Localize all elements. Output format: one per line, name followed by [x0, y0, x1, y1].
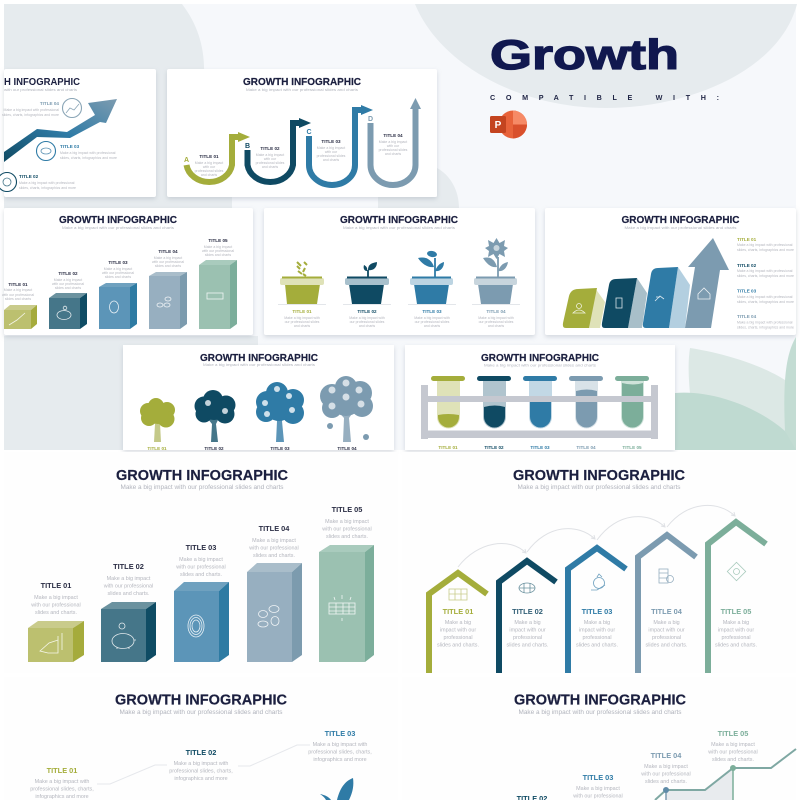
- label: title 04: Make a big impact with: [478, 316, 514, 320]
- label: title 03: with our professional: [572, 794, 623, 800]
- label: title 01: slides, charts, infographics and more: [737, 248, 794, 252]
- label: title 01: infographics and more: [35, 794, 89, 800]
- label: title 04: TITLE 04: [651, 607, 683, 616]
- label: title 04: and charts: [488, 324, 504, 328]
- label: title 03: Make a big impact with professional: [737, 295, 793, 299]
- label: title 05: Make a big: [723, 620, 749, 626]
- pot 4: flower: [472, 238, 520, 305]
- item: title 03: with our: [325, 150, 338, 154]
- arrow B: [245, 118, 311, 182]
- label: title 02: professional: [513, 635, 542, 641]
- icon: PowerPoint logo: [490, 110, 527, 138]
- label: title 05: Make a big impact: [325, 519, 369, 525]
- label: title 01: Make a big impact with: [284, 316, 320, 320]
- label: title 03: TITLE 03: [186, 543, 216, 552]
- subtitle: Make a big impact with our professional slides and charts: [203, 363, 315, 367]
- label: title 04: TITLE 04: [651, 751, 682, 760]
- label: title 04: slides and charts.: [645, 779, 687, 785]
- label: title 03: our professional slides: [415, 320, 450, 324]
- bar 2: [101, 602, 156, 662]
- label: tube titles (cropped): TITLE 03: [530, 445, 550, 450]
- pot 2: sprout: [343, 262, 391, 305]
- label: title 02: impact with our: [509, 628, 546, 634]
- label: title 05: impact with our: [718, 628, 754, 634]
- item: title 01: [195, 154, 224, 177]
- item: title 04: with our: [387, 144, 400, 148]
- label: title 04: our professional slides: [479, 320, 514, 324]
- label: title 05: [715, 607, 757, 648]
- label: title 05: Make a big impact: [204, 245, 232, 249]
- arrow D: [368, 98, 421, 185]
- label: title 04: Make a big impact: [644, 764, 688, 770]
- label: title 02: TITLE 02: [512, 607, 543, 616]
- icon: coin stacks: [329, 595, 355, 621]
- heading: GROWTH INFOGRAPHIC: [340, 215, 458, 226]
- rack front bar: [428, 396, 651, 402]
- icon: money bag: [591, 574, 605, 590]
- label: title 02: [349, 309, 385, 328]
- label: title 02: TITLE 02: [58, 271, 78, 276]
- item: title 04: TITLE 04: [40, 101, 59, 106]
- label: title 03: TITLE 03: [422, 309, 442, 314]
- label: title 02: [169, 748, 233, 782]
- label: title 03: slides and charts: [105, 275, 131, 279]
- item: title 03: [317, 139, 346, 162]
- label: title 03: [175, 543, 226, 578]
- bar 4: [149, 272, 187, 329]
- label: title 01: professional: [443, 635, 473, 641]
- label: title 01: slides and charts.: [35, 610, 77, 616]
- label: title 01: [30, 581, 81, 616]
- label: title 03: Make a big impact with: [313, 742, 367, 748]
- label: title 03: Make a big impact: [576, 786, 620, 792]
- chart: folded ribbon arrow: [563, 238, 729, 328]
- label: title 05: Make a big impact: [711, 742, 755, 748]
- label: title 01: Make a big impact: [34, 595, 78, 601]
- label: title 04: TITLE 04: [158, 249, 178, 254]
- label: title 03: professional slides, charts,: [308, 750, 372, 756]
- label: title 05: with our professional: [202, 249, 234, 253]
- label: tube titles (cropped): TITLE 02: [484, 445, 504, 450]
- label: title 04: with our professional: [152, 260, 184, 264]
- label: title 04: Make a big: [653, 620, 680, 626]
- icon: ribbon icons: [573, 288, 710, 313]
- label: title 05: [202, 238, 234, 257]
- item: title 03: [60, 144, 117, 160]
- heading: GROWTH INFOGRAPHIC: [481, 353, 599, 364]
- label: title 02: Make a big impact: [54, 278, 82, 282]
- label: title 01: TITLE 01: [8, 282, 28, 287]
- panel: large 3D bars slide: [4, 452, 398, 673]
- item: title 01: professional slides: [195, 169, 224, 173]
- item: title 02: [256, 146, 285, 169]
- label: title 01: [437, 607, 479, 648]
- item: title 04: professional slides: [379, 148, 408, 152]
- label: title 01: Make a big impact with: [35, 779, 89, 785]
- icon: hand with coins: [40, 633, 62, 653]
- icon: PowerPoint logo: P: [495, 120, 502, 131]
- heading: GROWTH INFOGRAPHIC: [59, 215, 177, 226]
- label: title 03: [308, 729, 372, 763]
- subtitle: Make a big impact with our professional slides and charts: [246, 88, 358, 92]
- decoration: green leaves: [675, 337, 796, 450]
- arrow A: A: [184, 157, 189, 164]
- rack back posts and bottom bar: [421, 385, 658, 439]
- subtitle: Make a big impact with our professional slides and charts: [120, 709, 282, 716]
- label: title 02: infographics and more: [174, 776, 228, 782]
- bar 1: [28, 621, 84, 662]
- heading: GROWTH INFOGRAPHIC: [514, 692, 687, 708]
- label: title 01: professional slides, charts,: [30, 786, 94, 792]
- label: title 02: [507, 607, 548, 648]
- label: title 02: professional slides, charts,: [169, 768, 233, 774]
- label: title 03: [737, 288, 794, 304]
- arrow C: [306, 105, 373, 185]
- label: title 01: Make a big impact: [4, 288, 32, 292]
- label: title 03: [572, 773, 623, 800]
- text: compatible with: COMPATIBLE WITH:: [490, 93, 719, 102]
- label: title 03: [102, 260, 134, 279]
- label: title 05: slides and charts.: [326, 534, 368, 540]
- item: title 02: slides, charts, infographics and more: [19, 186, 76, 190]
- label: title 01: [737, 237, 794, 252]
- label: title 05: professional: [721, 635, 751, 641]
- subtitle: Make a big impact with our professional slides and charts: [518, 484, 680, 491]
- item: title 04: slides, charts, infographics and more: [2, 113, 59, 117]
- label: title 02: and charts: [359, 324, 375, 328]
- item: title 04: [379, 133, 408, 156]
- step 1: [429, 573, 487, 673]
- item: title 02: professional slides: [256, 161, 285, 165]
- item: title 02: TITLE 02: [260, 146, 280, 151]
- step 3: [568, 548, 626, 673]
- tube 4: [569, 376, 603, 429]
- label: tree titles (cropped): [147, 446, 357, 451]
- panel: house steps slide: [402, 452, 796, 673]
- subtitle: Make a big impact with our professional slides and charts: [624, 226, 737, 230]
- arrow: rising trend: [4, 99, 117, 162]
- subtitle: Make a big impact with our professional slides and charts: [484, 364, 596, 368]
- item: title 01: with our: [203, 165, 216, 169]
- icon: banknotes: [727, 562, 746, 581]
- item: title 04: [2, 101, 59, 117]
- label: title 04: [737, 314, 794, 330]
- label: title 03: slides and charts.: [180, 572, 222, 578]
- label: title 03: professional: [582, 635, 612, 641]
- label: tube titles (cropped): TITLE 01: [438, 445, 458, 450]
- label: title 02: Make a big impact with: [174, 761, 228, 767]
- label: title 03: impact with our: [579, 628, 615, 634]
- item: title 03: Make a big impact: [317, 146, 345, 150]
- bar 4: [247, 563, 302, 662]
- subtitle: with our professional slides and charts: [4, 88, 77, 92]
- tree 3: [256, 382, 304, 442]
- arrow C: C: [306, 129, 312, 136]
- label: title 04: slides and charts: [155, 264, 181, 268]
- subtitle: Make a big impact with our professional slides and charts: [518, 709, 682, 716]
- pot 3: plant: [408, 250, 456, 305]
- label: title 04: TITLE 04: [737, 314, 757, 319]
- item: title 03: TITLE 03: [321, 139, 341, 144]
- label: title 05: TITLE 05: [208, 238, 228, 243]
- step 2: [499, 561, 556, 673]
- icon: coins: [258, 606, 279, 627]
- tree 2: [194, 390, 236, 442]
- label: title 04: with our professional: [640, 772, 691, 778]
- label: title 04: Make a big impact with professional: [737, 320, 793, 324]
- panel: U-arrows slide: [167, 69, 437, 197]
- tree 1: [140, 398, 175, 442]
- arrow B: B: [245, 143, 250, 150]
- label: title 02: slides and charts.: [108, 591, 149, 597]
- label: title 03: slides, charts, infographics and more: [737, 300, 794, 304]
- subtitle: Make a big impact with our professional slides and charts: [343, 226, 455, 230]
- label: title 02: with our professional: [103, 584, 153, 590]
- item: title 04: Make a big impact: [379, 140, 407, 144]
- label: title 01: our professional slides: [285, 320, 320, 324]
- panel: folded arrow slide: [545, 208, 796, 335]
- bar 2: [49, 293, 87, 329]
- bar 3: [174, 582, 229, 662]
- label: title 05: slides and charts: [205, 253, 231, 257]
- item: title 03: TITLE 03: [60, 144, 80, 149]
- label: title 03: TITLE 03: [325, 729, 355, 738]
- label: tree titles (cropped): TITLE 02: [204, 446, 224, 451]
- label: title 04: [248, 524, 299, 559]
- label: title 04: slides and charts.: [646, 642, 687, 648]
- label: title 02: [103, 562, 153, 597]
- label: title 03: slides and charts.: [576, 642, 618, 648]
- item: title 03: Make a big impact with professional: [60, 151, 116, 155]
- label: title 01: TITLE 01: [47, 766, 77, 775]
- label: title 05: with our professional: [321, 526, 372, 532]
- subtitle: Make a big impact with our professional slides and charts: [120, 484, 284, 491]
- label: title 04: [152, 249, 184, 268]
- bar 5: [319, 545, 374, 662]
- icon: banknote: [449, 589, 467, 600]
- item: title 04: and charts: [385, 152, 401, 156]
- step 5: [708, 522, 766, 673]
- item: title 04: TITLE 04: [383, 133, 403, 138]
- label: title 02: TITLE 02: [357, 309, 377, 314]
- panel: test tubes slide: [405, 345, 675, 450]
- item: title 04: Make a big impact with professional: [4, 108, 59, 112]
- label: title 03: TITLE 03: [583, 773, 613, 782]
- icon: coins ring: [36, 142, 56, 160]
- heading: Growth: Growth: [490, 31, 679, 78]
- item: title 01: Make a big impact: [195, 161, 223, 165]
- label: title 05: TITLE 05: [332, 505, 362, 514]
- tree 4: [320, 376, 373, 442]
- tube 2: [477, 376, 511, 429]
- icon: coin stack: [519, 583, 535, 593]
- item: title 02: [19, 174, 76, 190]
- item: title 03: professional slides: [317, 154, 346, 158]
- panel: line chart slide: [402, 677, 796, 800]
- label: title 04: slides, charts, infographics and more: [737, 326, 794, 330]
- label: title 01: TITLE 01: [737, 237, 757, 242]
- subtitle: Make a big impact with our professional slides and charts: [62, 226, 174, 230]
- label: title 02: slides and charts: [55, 286, 81, 290]
- tube 3: [523, 376, 557, 429]
- panel: trees slide: [123, 345, 394, 451]
- label: title 03: with our professional: [102, 271, 134, 275]
- label: title 03: Make a big impact with: [414, 316, 450, 320]
- label: title 02: slides, charts, infographics and more: [737, 274, 794, 278]
- tube 5: [615, 376, 649, 429]
- heading: GROWTH INFOGRAPHIC: [243, 77, 361, 88]
- label: title 04: slides and charts.: [253, 553, 295, 559]
- label: tree titles (cropped): TITLE 03: [270, 446, 290, 451]
- label: title 04: [646, 607, 687, 648]
- label: title 02: Make a big impact: [107, 576, 151, 582]
- heading: GROWTH INFOGRAPHIC: [200, 353, 318, 364]
- panel: arrow slide (cropped): [0, 69, 156, 197]
- label: title 01: TITLE 01: [292, 309, 312, 314]
- label: title 04: TITLE 04: [259, 524, 290, 533]
- item: title 02: Make a big impact with professional: [19, 181, 75, 185]
- item: title 01: and charts: [201, 173, 217, 177]
- heading: GROWTH INFOGRAPHIC: [116, 468, 289, 484]
- label: title 04: [478, 309, 514, 328]
- label: title 03: Make a big impact: [104, 267, 132, 271]
- label: tube titles (cropped): [438, 445, 642, 450]
- label: title 01: slides and charts: [5, 297, 31, 301]
- label: title 03: TITLE 03: [108, 260, 128, 265]
- label: title 02: Make a big: [514, 620, 541, 626]
- label: title 03: infographics and more: [313, 757, 367, 763]
- heading: GROWTH INFOGRAPHIC: [115, 692, 288, 708]
- label: tube titles (cropped): TITLE 04: [576, 445, 596, 450]
- heading: GROWTH INFOGRAPHIC: [513, 468, 686, 484]
- label: title 01: TITLE 01: [41, 581, 71, 590]
- item: title 01: TITLE 01: [199, 154, 219, 159]
- label: tree titles (cropped): TITLE 01: [147, 446, 167, 451]
- icon: piggy bank: [112, 623, 136, 649]
- label: title 01: impact with our: [440, 628, 476, 634]
- icon: blue leaves: [320, 778, 353, 800]
- icon: coin stack with coin: [659, 569, 674, 583]
- item: title 02: TITLE 02: [19, 174, 39, 179]
- arrow D: D: [368, 116, 373, 123]
- bar 3: [99, 283, 137, 329]
- label: title 01: with our professional: [30, 602, 81, 608]
- label: title 01: with our professional: [2, 293, 34, 297]
- label: title 02: slides and charts.: [507, 642, 548, 648]
- label: title 02: [737, 263, 794, 278]
- label: title 01: TITLE 01: [443, 607, 473, 616]
- label: tree titles (cropped): TITLE 04: [337, 446, 357, 451]
- label: title 02: our professional slides: [350, 320, 385, 324]
- label: title 02: Make a big impact with professional: [737, 269, 793, 273]
- label: title 04: with our professional: [248, 546, 299, 552]
- label: title 04: [640, 751, 691, 785]
- label: title 01: [30, 766, 94, 800]
- bar 5: [199, 260, 237, 329]
- icon: chart ring: [62, 98, 82, 118]
- label: title 05: slides and charts.: [712, 757, 754, 763]
- heading: H INFOGRAPHIC: [4, 77, 80, 88]
- step 4: [638, 535, 696, 673]
- label: title 05: TITLE 05: [721, 607, 751, 616]
- item: title 03: and charts: [323, 158, 339, 162]
- label: title 05: [321, 505, 372, 540]
- item: title 02: Make a big impact: [256, 153, 284, 157]
- label: title 01: Make a big: [445, 620, 471, 626]
- label: title 01: slides and charts.: [437, 642, 479, 648]
- panel: plant pots slide: [264, 208, 535, 335]
- label: title 01: and charts: [294, 324, 310, 328]
- panel: plant steps slide: [4, 677, 398, 800]
- label: tube titles (cropped): TITLE 05: [622, 445, 642, 450]
- label: title 05: with our professional: [707, 750, 758, 756]
- tube 1: [431, 376, 465, 429]
- label: title 02: TITLE 02: [737, 263, 757, 268]
- pot 1: seeds: [278, 262, 326, 305]
- label: title 04: Make a big impact: [252, 538, 296, 544]
- connector lines: [97, 745, 310, 784]
- label: title 03: with our professional: [175, 564, 226, 570]
- heading: GROWTH INFOGRAPHIC: [622, 215, 740, 226]
- label: title 03: TITLE 03: [737, 288, 757, 294]
- label: title 01: Make a big impact with professional: [737, 243, 793, 247]
- panel: small bars slide: [2, 208, 253, 335]
- promo banner background: [4, 4, 797, 450]
- label: title 03: Make a big: [584, 620, 610, 626]
- arcs between steps: [458, 505, 735, 567]
- arrow A: [184, 132, 250, 182]
- label: title 03: [414, 309, 450, 328]
- label: title 02: with our professional: [52, 282, 84, 286]
- label: title 03: TITLE 03: [582, 607, 612, 616]
- icon: dollar ring: [0, 172, 16, 192]
- label: title 03: [576, 607, 618, 648]
- label: title 05: slides and charts.: [715, 642, 757, 648]
- bar 1: [4, 305, 37, 329]
- label: title 04: TITLE 04: [486, 309, 506, 314]
- label: title 02: TITLE 02: [113, 562, 144, 571]
- label: title 04: Make a big impact: [154, 256, 182, 260]
- label: title 01: [2, 282, 34, 301]
- line chart: [655, 749, 796, 800]
- item: title 02: with our: [264, 157, 277, 161]
- label: title 03: Make a big impact: [179, 557, 223, 563]
- label: title 02: [52, 271, 84, 290]
- label: title 04: impact with our: [648, 628, 685, 634]
- label: title 04: professional: [652, 635, 681, 641]
- item: title 02: and charts: [262, 165, 278, 169]
- label: title 01: [284, 309, 320, 328]
- label: title 02: Make a big impact with: [349, 316, 385, 320]
- item: title 03: slides, charts, infographics and more: [60, 156, 117, 160]
- icon: dollar coin: [188, 615, 204, 637]
- label: title 05: [707, 729, 758, 763]
- label: title 03: and charts: [424, 324, 440, 328]
- label: title 05: TITLE 05: [718, 729, 748, 738]
- label: title 02: TITLE 02: [186, 748, 216, 757]
